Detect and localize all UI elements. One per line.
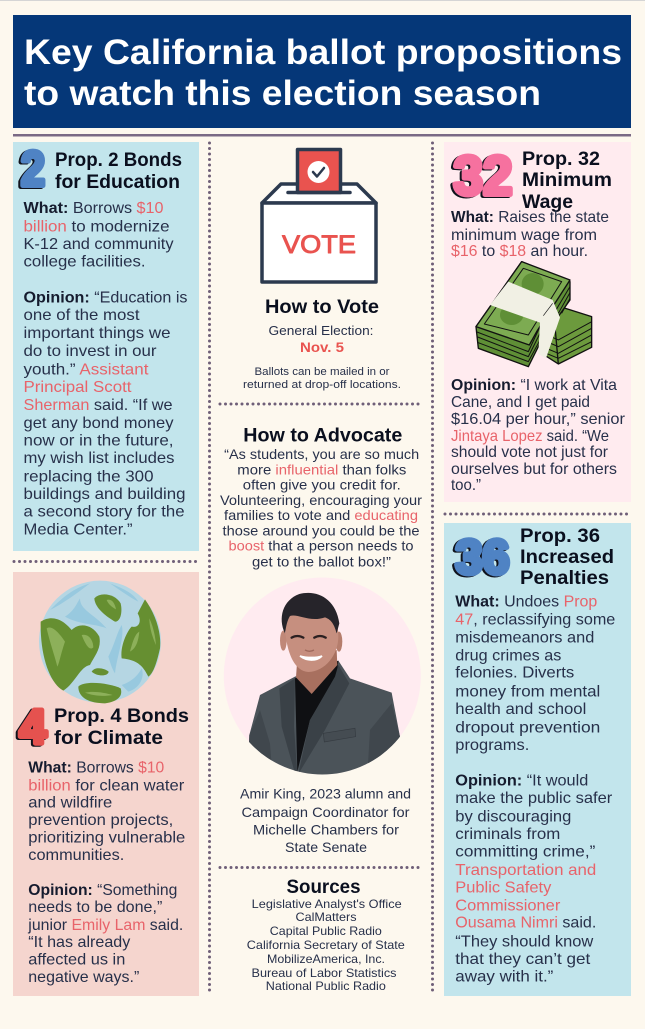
opinion text: Cane, and I get paid — [451, 394, 590, 411]
opinion text: Opinion: “I work at Vita — [451, 377, 617, 394]
opinion text: Opinion: “Education is — [24, 290, 188, 306]
what text: prioritizing vulnerable — [28, 830, 185, 846]
opinion text: make the public safer — [455, 790, 613, 807]
caption: Amir King, 2023 alumn and — [240, 786, 411, 802]
quote: those around you could be the — [222, 522, 420, 538]
caption: Campaign Coordinator for — [242, 804, 410, 820]
what text — [28, 760, 185, 864]
quote: Volunteering, encouraging your — [220, 492, 422, 508]
heading: Sources — [286, 877, 360, 898]
caption: State Senate — [285, 839, 367, 855]
opinion text: now or in the future, — [24, 432, 174, 450]
what text: money from mental — [455, 684, 600, 700]
opinion text: a second story for the — [24, 504, 185, 520]
opinion text: replacing the 300 — [24, 468, 154, 486]
opinion text: away with it.” — [455, 968, 553, 986]
what text: and wildfire — [28, 794, 112, 812]
quote: “As students, you are so much — [224, 446, 419, 462]
quote: more influential than folks — [237, 462, 406, 478]
source list: MobilizeAmerica, Inc. — [267, 952, 385, 966]
what text: 47, reclassifying some — [455, 612, 615, 628]
opinion text: get any bond money — [24, 415, 174, 432]
title banner — [13, 15, 631, 128]
opinion text: youth.” Assistant — [24, 362, 149, 378]
source list: Bureau of Labor Statistics — [252, 966, 396, 980]
what text: misdemeanors and — [455, 630, 594, 646]
what text: billion for clean water — [28, 778, 185, 794]
heading: Penalties — [520, 568, 609, 589]
quote: families to vote and educating — [224, 507, 418, 523]
what text — [451, 209, 609, 260]
icon: stack of money — [476, 262, 592, 367]
what text: What: Borrows $10 — [24, 200, 164, 217]
heading: How to Vote — [265, 297, 379, 318]
heading — [55, 150, 182, 193]
icon: ballot box — [262, 150, 376, 282]
what text: What: Undoes Prop — [455, 594, 597, 610]
opinion text: Media Center.” — [24, 522, 132, 538]
opinion text: by discouraging — [455, 808, 571, 826]
number 2: 2 — [21, 142, 45, 196]
opinion text — [455, 772, 613, 986]
opinion text: “They should know — [455, 934, 594, 950]
what text: dropout prevention — [455, 720, 600, 736]
opinion text: committing crime,” — [455, 844, 595, 860]
opinion text: ourselves but for others — [451, 461, 617, 478]
what text: minimum wage from — [451, 227, 597, 244]
opinion text: needs to be done,” — [28, 899, 162, 916]
opinion text: important things we — [24, 325, 171, 342]
election date: General Election: — [268, 323, 374, 338]
what text: college facilities. — [24, 254, 146, 270]
what text: What: Raises the state — [451, 209, 609, 226]
election date: Nov. 5 — [300, 339, 344, 355]
vote label: VOTE — [282, 231, 356, 259]
panel: Prop. 2 bonds for education — [13, 142, 199, 551]
heading — [520, 526, 614, 589]
what text: health and school — [455, 701, 586, 718]
panel: Prop. 32 minimum wage — [444, 142, 631, 502]
heading: Prop. 4 Bonds — [54, 706, 189, 727]
opinion text: Sherman said. “If we — [24, 397, 173, 414]
what text: prevention projects, — [28, 812, 173, 829]
panel: sources — [247, 877, 405, 993]
heading: Minimum — [522, 170, 612, 191]
heading: Prop. 36 — [520, 526, 600, 547]
panel: Prop. 4 bonds for climate — [13, 572, 199, 996]
opinion text: criminals from — [455, 826, 560, 843]
opinion text: Opinion: “Something — [28, 882, 177, 899]
ballots note — [243, 366, 401, 391]
opinion text: junior Emily Lam said. — [27, 917, 183, 934]
heading — [522, 149, 612, 213]
heading: for Climate — [54, 728, 163, 749]
number 36: 36 — [456, 532, 510, 584]
what text: communities. — [28, 847, 124, 864]
icon: globe — [39, 581, 161, 703]
opinion text: should vote not just for — [451, 444, 609, 461]
title banner: to watch this election season — [24, 74, 541, 113]
what text: What: Borrows $10 — [28, 760, 164, 776]
opinion text: one of the most — [24, 307, 140, 324]
what text: billion to modernize — [24, 218, 170, 236]
source list: California Secretary of State — [247, 938, 405, 952]
source list: Legislative Analyst's Office — [252, 897, 402, 911]
opinion text: Principal Scott — [24, 379, 132, 396]
opinion text: my wish list includes — [24, 450, 174, 467]
opinion text: negative ways.” — [28, 969, 139, 986]
panel: how to advocate — [220, 426, 422, 855]
opinion text: “It has already — [28, 934, 130, 951]
opinion text: Public Safety — [455, 880, 551, 896]
what text: felonies. Diverts — [455, 664, 574, 682]
heading: Prop. 32 — [522, 149, 600, 170]
heading: Increased — [520, 547, 614, 568]
heading: for Education — [55, 172, 180, 193]
opinion text: Commissioner — [455, 898, 561, 914]
title banner: Key California ballot propositions — [24, 33, 622, 72]
quote: boost that a person needs to — [228, 538, 414, 554]
opinion text: do to invest in our — [24, 343, 157, 360]
heading — [54, 706, 189, 749]
heading: How to Advocate — [243, 426, 402, 446]
opinion text: buildings and building — [24, 486, 186, 503]
what text — [455, 594, 615, 754]
source list — [247, 897, 405, 993]
source list: Capital Public Radio — [270, 924, 382, 938]
election date — [268, 323, 374, 355]
what text: K-12 and community — [24, 236, 174, 253]
source list: National Public Radio — [266, 979, 386, 993]
what text: programs. — [455, 737, 529, 754]
opinion text: $16.04 per hour,” senior — [451, 411, 626, 428]
opinion text: Transportation and — [455, 862, 596, 879]
opinion text: Jintaya Lopez said. “We — [451, 428, 609, 445]
quote: get to the ballot box!” — [252, 554, 391, 570]
opinion text: Ousama Nimri said. — [455, 914, 596, 932]
heading: Wage — [522, 192, 573, 213]
opinion text: Opinion: “It would — [455, 772, 588, 790]
portrait photo — [224, 578, 421, 787]
opinion text: affected us in — [28, 952, 125, 968]
quote: often give you credit for. — [243, 476, 401, 492]
caption: Michelle Chambers for — [253, 822, 399, 838]
ballots note: Ballots can be mailed in or — [254, 366, 390, 378]
opinion text — [27, 882, 183, 986]
opinion text: that they can’t get — [455, 951, 591, 968]
opinion text — [451, 377, 626, 494]
number 4: 4 — [20, 702, 47, 754]
heading: Prop. 2 Bonds — [55, 150, 182, 171]
ballots note: returned at drop-off locations. — [243, 379, 401, 391]
source list: CalMatters — [296, 910, 356, 924]
what text — [24, 200, 174, 270]
panel: Prop. 36 increased penalties — [444, 523, 631, 996]
what text: $16 to $18 an hour. — [451, 243, 588, 260]
quote — [220, 446, 422, 570]
caption — [240, 786, 411, 855]
number 32: 32 — [454, 144, 512, 206]
what text: drug crimes as — [455, 648, 561, 664]
opinion text: too.” — [451, 477, 481, 494]
panel: how to vote — [243, 150, 401, 391]
opinion text — [24, 290, 188, 538]
